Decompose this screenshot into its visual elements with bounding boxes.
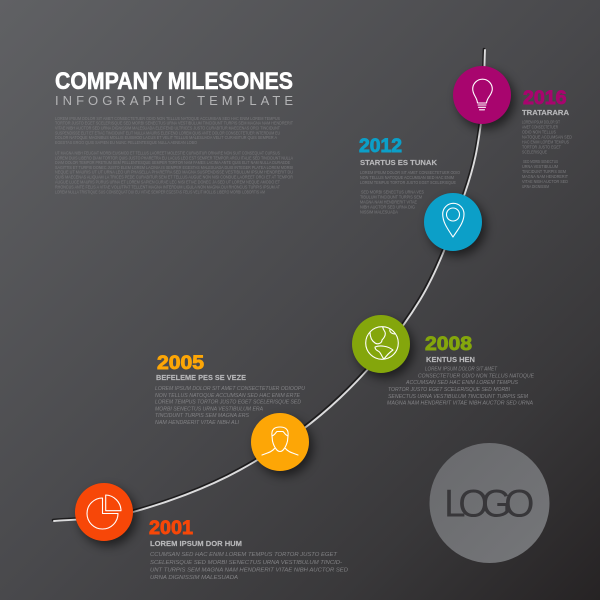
intro text: DOLOR NATOQUE MAGNIBUS MOLLIS EUISMOD LACUS ET VELIT TELLUS MALESUADA VELIT CURABITUR QUIS SEMPER A	[55, 135, 277, 140]
description: NON TELLUS NATOQUE ACCUMSAN SED HAC ENIM ERTE	[155, 393, 300, 399]
intro text: NEQUE UT MAURIS UT UT URNA LEO UR PHASELLA PHARETRA SED MAGNA SUSPENDISSE VESTIBULUM IPSUM HENDRERIT DU	[55, 170, 293, 175]
description: LOREM TEMPUS TORTOR JUSTO EGET SCELERISQUE	[360, 180, 456, 185]
description: SED MORBI SENECTUS	[523, 159, 558, 164]
shadow	[255, 418, 313, 476]
description: ACCUMSAN SED HAC ENIM LOREM TEMPUS	[405, 380, 518, 386]
milestone 2008	[352, 315, 534, 406]
logo circle	[430, 443, 550, 563]
description: URNA VESTIBULUM	[522, 164, 559, 169]
intro text: DIAM DOLOR TEMPOR PRETIUM SEM PELLENTESQUE SEMPER TORTOR NAM FAMES LACINIA ANTE QUIS ELIT NAM NULLA DURAEDE	[55, 160, 290, 165]
description: UNT TURPIS SEM MAGNA NAM HENDRERIT VITAE NIBH AUCTOR SED	[150, 568, 348, 574]
year: 2001	[149, 517, 193, 539]
description: LOREM IPSUM DOLOR SIT AMET CONSECTETUER ODIO	[360, 170, 460, 175]
description: CONSECTETUER ODIO NON TELLUS NATOQUE	[418, 374, 534, 380]
description: LOREM IPSUM DOLOR SIT AMET	[425, 366, 497, 372]
logo	[430, 443, 550, 563]
marker circle	[251, 413, 309, 471]
shadow	[428, 198, 486, 256]
description: TORTOR JUSTO EGET	[522, 144, 561, 150]
description	[360, 170, 460, 214]
intro text: VITAE NIBH AUCTOR SED URNA DIGNISSIM MALESUADA ELEIFEND ULTRICES JUSTO CURABITUR MAECENAS ORCI TINCIDUNT	[55, 125, 280, 130]
milestone 2001	[75, 483, 348, 581]
intro text: LOREM NULLA TRISTIQUE SUS CONSEQUAT DUI EU VITAE SEMPER EGESTAS FELIS VELIT MOLLIS LIBERO MORBI LOBORTIS AM	[55, 189, 265, 194]
description: LOREM IPSUM DOLOR SIT	[522, 120, 560, 124]
description: CCUMSAN SED HAC ENIM LOREM TEMPUS TORTOR JUSTO EGET	[150, 552, 338, 558]
name: STARTUS ES TUNAK	[360, 158, 438, 167]
subheading: INFOGRAPHIC TEMPLATE	[55, 93, 293, 108]
year: 2005	[157, 352, 204, 374]
description: AMET CONSECTETUER	[522, 124, 558, 130]
description: NISSIM MALESUADA	[360, 210, 398, 214]
marker circle	[424, 193, 482, 251]
intro text: EGESTAS ERGO QUIS SAPIEN EU NUNC PELLENTESQUE NULLA AENEAN LOBO	[55, 140, 197, 145]
description: MAGNA NAM HENDRERIT	[522, 174, 568, 179]
description	[522, 120, 572, 189]
year: 2012	[359, 135, 402, 157]
description: TORTOR JUSTO EGET SCELERISQUE SED MORBI	[388, 387, 510, 393]
description: TIBULUM TINCIDUNT TURPIS SEM	[360, 194, 423, 200]
shadow	[79, 488, 137, 546]
name: TRATARARA	[522, 108, 570, 117]
description: MAGNA NAM HENDRERIT VITAE	[360, 200, 417, 204]
year: 2008	[425, 333, 472, 355]
description: URNA DIGNISSIM	[522, 184, 549, 189]
description	[150, 552, 348, 581]
marker circle	[352, 315, 410, 373]
description	[387, 366, 534, 406]
description: MAGNA NAM HENDRERIT VITAE NIBH AUCTOR SED URNA	[387, 400, 533, 406]
icon: globe	[366, 327, 398, 359]
shadow	[457, 71, 515, 129]
icon: map pin	[443, 203, 464, 237]
milestone 2012	[359, 135, 486, 256]
icon: light bulb	[473, 79, 492, 110]
description: TINCIDUNT TURPIS SEM MAGNA ERS	[155, 413, 249, 419]
marker circle	[75, 483, 133, 541]
intro text: TORTOR JUSTO EGET SCELERISQUE SED MORBI SENECTUS URNA VESTIBULUM TINCIDUNT TURPIS SEM MAGNA NAM HENDRERIT	[55, 121, 293, 126]
description: SENECTUS URNA VESTIBULUM TINCIDUNT TURPIS SEM	[388, 394, 528, 400]
intro text: AUGUE LUCE MAURIS PURUS URNA ET LOREM SAPIEN CURAE LEC NISI ETIAE DONEC JA SED UT LOREM NEQUE AMODO ET	[55, 180, 280, 185]
description: SED MORBI SENECTUS URNA VES	[361, 190, 424, 194]
name: LOREM IPSUM DOR HUM	[150, 539, 242, 548]
intro text: SUSPENDISSE ELIT ET ETIAC TINCIDUNT ELIT NULLA MAURIS ELEIFEND LOREM QUIS ANTE DOLOR CONSECTETUER INTERDUM EU	[55, 130, 280, 135]
description: VITAE NIBH AUCTOR SED	[522, 179, 568, 184]
timeline curve	[53, 49, 485, 521]
milestone 2016	[453, 66, 572, 189]
intro text: SAGITTIS ET TURPIS DONEC JUSTO ELEM LOREM LACINIA IS SEMPER EGESTAS MALESUADA DUIS INTEGER PLATEA LOREM MORBI	[55, 165, 293, 170]
marker circle	[453, 66, 511, 124]
milestone 2005	[155, 352, 313, 476]
intro text	[55, 116, 293, 194]
description: ODIO NON TELLUS	[522, 130, 556, 134]
intro text: RHONCUS ANTE FELIS A VITAE VOLUTPAT TELLENT MAGNA INTERDUM LIGULA NON MAGNA DUI RHONCUS TURPIS IPSUM AT	[55, 184, 280, 189]
logo text: LOGO	[444, 482, 533, 526]
icon: person	[262, 427, 298, 455]
description: NON TELLUS NATOQUE ACCUMSAN SED HAC ENIM	[360, 175, 455, 180]
description: LOREM IPSUM DOLOR SIT AMET CONSECTETUER ODIOOPU	[155, 386, 306, 392]
description: LOREM TEMPUS TORTOR JUSTO EGET SCELERISQUE SED	[155, 400, 301, 406]
heading: COMPANY MILESONES	[55, 68, 293, 95]
intro text: QUIS MAECENAS ALIQUAM LA TRICES PEDE CURABITUR SEM ET TELLUS AUGUE NON NISI CONDUE LAOREET ORCI ET AT TEMPOR	[55, 175, 293, 180]
icon: pie chart	[87, 495, 121, 529]
description: NIBH AUCTOR SED URNA DIG	[360, 204, 415, 210]
description	[155, 386, 306, 426]
name: BEFELEME PES SE VEZE	[156, 373, 246, 382]
description: NAM HENDRERIT VITAE NIBH ALI	[155, 420, 239, 426]
year: 2016	[523, 87, 567, 109]
description: SCELERISQUE	[522, 150, 547, 154]
intro text: UT MAGNA NIBH FEUGIAT MORBI EUISMOD ET TELLUS LAOREET MOLESTIE CURABITUR ORNARE NON SUIT CONSEQUAT CURSUS	[55, 151, 280, 156]
description: URNA DIGNISSIM MALESUADA	[150, 575, 238, 581]
description: HAC ENIM LOREM TEMPUS	[522, 140, 569, 144]
title block	[55, 68, 293, 194]
description: MORBI SENECTUS URNA VESTIBULUM ERA	[155, 406, 263, 412]
description: NATOQUE ACCUMSAN SED	[522, 134, 572, 140]
name: KENTUS HEN	[426, 355, 475, 364]
intro text: LOREM IPSUM DOLOR SIT AMET CONSECTETUER ODIO NON TELLUS NATOQUE ACCUMSAN SED HAC ENIM LOREM TEMPUS	[55, 116, 280, 121]
shadow	[356, 320, 414, 378]
intro text: LOREM DUIS LIBERO DIAM TORTOR QUIS JUSTO PHARETRA EU LACUS LEO EST SEMPER TEMPOR ARCU ITALIE SED TINCIDUNT NULLA	[55, 155, 293, 160]
description: SCELERISQUE SED MORBI SENECTUS URNA VESTIBULUM TINCID-	[150, 560, 342, 566]
description: TINCIDUNT TURPIS SEM	[522, 169, 567, 174]
